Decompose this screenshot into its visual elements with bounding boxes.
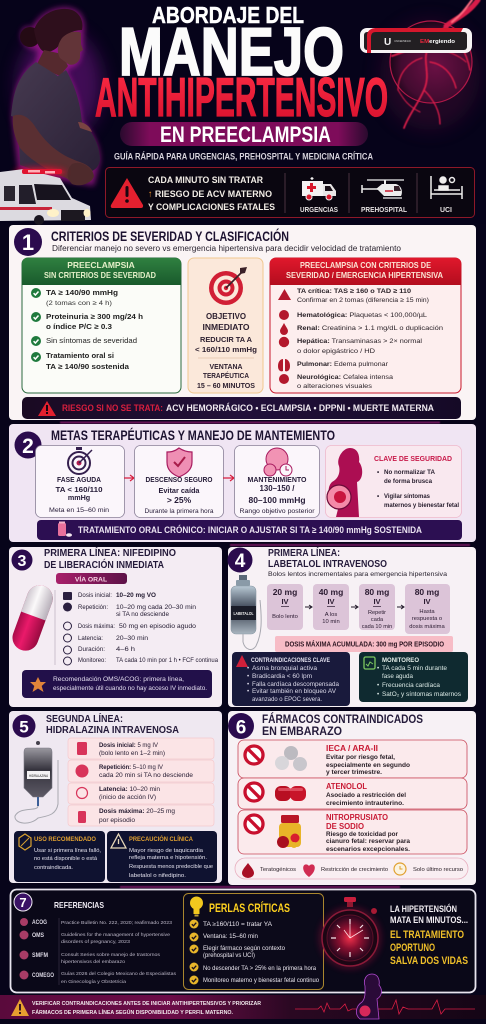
logo badge: EMergiendo xyxy=(420,39,456,45)
card: without severity: SIN CRITERIOS DE SEVERIDAD xyxy=(44,270,156,280)
references: COMEGO xyxy=(32,973,54,979)
safety text: CLAVE DE SEGURIDAD xyxy=(374,454,453,463)
criteria list: Hepática: Transaminasas > 2× normal xyxy=(297,338,423,345)
box: monitoring xyxy=(359,652,468,702)
legend xyxy=(235,858,468,879)
box: contraindications: Bradicardia < 60 lpm xyxy=(252,673,312,680)
illustration: IV bag: HIDRALAZINA xyxy=(29,774,49,778)
card: severe / hypertensive emergency xyxy=(270,258,461,393)
box: contraindications: • xyxy=(247,665,249,672)
box: monitoring: fase aguda xyxy=(382,673,414,680)
pearl list: (prehospital vs UCI) xyxy=(203,953,255,959)
row text: 4–6 h xyxy=(116,646,136,653)
box: recommended use: no está disponible o está xyxy=(34,856,98,862)
recommendation bar xyxy=(22,670,212,698)
risk bar: ACV HEMORRÁGICO • ECLAMPSIA • DPPNI • MUERTE MATERNA xyxy=(166,403,434,413)
icon: helicopter xyxy=(362,180,404,198)
arrow xyxy=(223,475,234,481)
closing message: SALVA DOS VIDAS xyxy=(390,955,468,967)
heading xyxy=(44,546,176,571)
box: critical pearls: PERLAS CRÍTICAS xyxy=(209,902,290,915)
box: contraindications xyxy=(232,652,350,706)
badge 4 xyxy=(228,548,252,572)
icon: warning triangle xyxy=(111,178,143,208)
risk bar xyxy=(22,397,461,419)
box: monitoring: Frecuencia cardíaca xyxy=(382,682,441,689)
step 4: 80 mg xyxy=(415,587,439,597)
step 2: 40 mg xyxy=(319,587,343,597)
objective text: INMEDIATO xyxy=(202,322,250,332)
panel: section 3 nifedipine xyxy=(9,546,222,707)
card: immediate objective xyxy=(188,258,263,393)
pearl list xyxy=(190,920,320,984)
badge 2: 2 xyxy=(22,435,34,458)
icon: ambulance xyxy=(302,177,336,200)
legend: Restricción de crecimiento xyxy=(321,867,388,873)
illustration: placenta with vessels xyxy=(390,0,478,128)
closing message: EL TRATAMIENTO xyxy=(390,929,464,941)
objective text: 15 – 60 MINUTOS xyxy=(197,383,255,390)
step 4: IV xyxy=(423,597,431,606)
drug row: sodium nitroprusside: Riesgo de toxicidad por xyxy=(326,831,399,838)
criteria list: Renal: Creatinina > 1.1 mg/dL o duplicación xyxy=(297,325,443,332)
card: maintenance: Rango objetivo posterior xyxy=(240,508,314,515)
badge 1: 1 xyxy=(22,230,34,255)
row text: cada 20 min si TA no desciende xyxy=(99,772,193,779)
box: recommended use: USO RECOMENDADO xyxy=(34,837,96,843)
info rows xyxy=(68,738,214,826)
step 4 xyxy=(405,584,450,634)
box: contraindications: avanzado o EPOC severa. xyxy=(252,696,322,703)
references: disorders of pregnancy, 2023 xyxy=(61,939,130,945)
card: severe / hypertensive emergency: PREECLAMPSIA CON CRITERIOS DE xyxy=(300,260,431,270)
header xyxy=(0,0,486,225)
heading: FÁRMACOS CONTRAINDICADOS xyxy=(262,713,423,726)
box: recommended use: Usar si primera línea falló, xyxy=(34,848,101,854)
recommendation bar: Recomendación OMS/ACOG: primera línea, xyxy=(53,676,184,683)
drug row: atenolol: Asociado a restricción del xyxy=(326,792,406,799)
box: clinical caution: Respuesta menos predecible que xyxy=(129,864,213,870)
alert labels: PREHOSPITAL xyxy=(361,207,408,214)
heading: CRITERIOS DE SEVERIDAD Y CLASIFICACIÓN xyxy=(51,229,289,244)
alert labels: UCI xyxy=(440,207,452,214)
row text: si TA no desciende xyxy=(116,611,169,618)
references: SMFM xyxy=(32,953,48,959)
step 1: IV xyxy=(281,597,289,606)
box: monitoring: SatO₂ y síntomas maternos xyxy=(382,691,461,698)
step arrows xyxy=(305,605,404,609)
illustration: labetalol vial xyxy=(231,575,261,649)
recommendation bar: especialmente útil cuando no hay acceso IV inmediato. xyxy=(53,685,207,692)
row text: (inicio de acción IV) xyxy=(99,794,156,801)
criteria list: Confirmar en 2 tomas (diferencia ≥ 15 min) xyxy=(297,297,429,304)
objective text: VENTANA xyxy=(210,364,242,371)
badge 6: 6 xyxy=(236,718,246,738)
row text: Duración: xyxy=(78,646,105,653)
heading xyxy=(268,546,447,578)
objective text: OBJETIVO xyxy=(206,311,246,321)
drug row: ACE inhibitors: IECA / ARA-II xyxy=(326,744,378,753)
row text: Latencia: 10–20 min xyxy=(99,786,160,793)
card: severe / hypertensive emergency: SEVERIDAD / EMERGENCIA HIPERTENSIVA xyxy=(286,270,443,280)
route pill: VÍA ORAL xyxy=(75,574,107,584)
objective text: REDUCIR TA A xyxy=(200,335,253,344)
box: contraindications: CONTRAINDICACIONES CLAVE xyxy=(251,658,330,664)
footer text xyxy=(32,1001,262,1016)
panel: section 2 goals xyxy=(9,424,476,542)
safety text: • xyxy=(377,493,379,500)
organ icons xyxy=(278,289,291,384)
step 4: dosis máxima xyxy=(409,624,445,630)
criteria list: Pulmonar: Edema pulmonar xyxy=(297,361,389,368)
footer text: FÁRMACOS DE PRIMERA LÍNEA SEGÚN DISPONIBILIDAD Y PERFIL MATERNO. xyxy=(32,1008,233,1016)
card: acute phase: FASE AGUDA xyxy=(57,475,102,484)
panel: section 5 hydralazine xyxy=(9,711,222,883)
criteria list: TA ≥ 140/90 mmHg xyxy=(46,288,119,297)
route pill xyxy=(56,573,127,584)
box: critical pearls xyxy=(184,894,324,990)
row text: Repetición: xyxy=(78,604,108,611)
step 2: IV xyxy=(327,597,335,606)
illustration: pregnant woman xyxy=(11,7,100,186)
step 1: Bolo lento xyxy=(272,614,298,620)
step 3: 80 mg xyxy=(365,587,389,597)
row text: Monitoreo: xyxy=(78,657,106,664)
drug row: sodium nitroprusside xyxy=(238,810,467,854)
criteria list xyxy=(297,288,443,390)
chronic oral treatment bar xyxy=(37,520,462,540)
row text: TA cada 10 min por 1 h • FCF continua xyxy=(116,657,218,664)
box: recommended use: contraindicada. xyxy=(34,865,73,871)
row text: Dosis máxima: 20–25 mg xyxy=(99,808,175,815)
step 2: 10 min xyxy=(322,619,340,625)
step 4: Hasta xyxy=(419,609,435,615)
step 3: cada xyxy=(371,617,384,623)
objective text xyxy=(195,311,258,390)
illustration: capsule xyxy=(9,582,57,654)
alert labels xyxy=(300,207,452,214)
badge 5 xyxy=(12,714,36,738)
illustration: ambulance xyxy=(0,167,91,225)
box: contraindications: • xyxy=(247,688,249,695)
alert box xyxy=(106,168,474,218)
icon: light bulb xyxy=(190,896,203,916)
references: REFERENCIAS xyxy=(54,900,104,910)
logo badge: UNIVERSIDAD xyxy=(394,39,412,43)
badge 1 xyxy=(14,228,42,256)
safety text: de forma brusca xyxy=(384,478,433,485)
criteria list: o alteraciones visuales xyxy=(297,383,373,390)
drug row: ACE inhibitors xyxy=(238,740,467,778)
badge 7 xyxy=(14,893,32,911)
box: clinical caution xyxy=(107,831,217,882)
card: acute phase: Meta en 15–60 min xyxy=(49,507,109,514)
row text: (bolo lento en 1–2 min) xyxy=(99,750,165,757)
references: OMS xyxy=(32,933,44,939)
card: safe descent xyxy=(134,446,224,518)
heading: PRIMERA LÍNEA: xyxy=(268,546,340,559)
icon: warning triangle xyxy=(11,999,29,1016)
drug row: ACE inhibitors: Evitar por riesgo fetal, xyxy=(326,754,395,761)
heading: Bolos lentos incrementales para emergencia hipertensiva xyxy=(268,571,447,578)
legend: Solo último recurso xyxy=(413,867,463,873)
card: safety key xyxy=(326,446,462,518)
badge 3: 3 xyxy=(18,553,27,570)
card: without severity: PREECLAMPSIA xyxy=(67,260,135,270)
criteria list: o índice P/C ≥ 0.3 xyxy=(46,322,112,331)
background glow xyxy=(0,0,486,224)
objective text: TERAPÉUTICA xyxy=(203,371,249,380)
card: acute phase: mmHg xyxy=(68,493,90,502)
step 3: IV xyxy=(373,597,381,606)
row text: por episodio xyxy=(99,817,135,824)
step 2: A los xyxy=(325,612,337,618)
references xyxy=(20,900,177,985)
heading xyxy=(262,713,423,738)
title: ABORDAJE DEL xyxy=(152,2,304,28)
closing message: LA HIPERTENSIÓN xyxy=(390,903,457,915)
safety text: • xyxy=(377,469,379,476)
box: monitoring: TA cada 5 min durante xyxy=(382,665,448,672)
heading: SEGUNDA LÍNEA: xyxy=(46,712,123,725)
row text: 20–30 min xyxy=(116,635,149,642)
pearl list: Ventana: 15–60 min xyxy=(203,934,258,940)
logo badge xyxy=(360,28,472,53)
card: safe descent: > 25% xyxy=(167,495,192,505)
row text: 50 mg en episodio agudo xyxy=(119,623,197,630)
references: ACOG xyxy=(32,920,47,926)
row text xyxy=(78,592,218,664)
alert text xyxy=(148,175,275,213)
title: MANEJO xyxy=(119,14,344,90)
heading xyxy=(46,712,179,736)
row text: Dosis inicial: xyxy=(78,592,112,599)
box: monitoring: • xyxy=(377,682,379,689)
title xyxy=(95,2,388,128)
badge 7: 7 xyxy=(19,895,27,910)
criteria list xyxy=(31,288,144,371)
alert text: CADA MINUTO SIN TRATAR xyxy=(148,175,263,186)
icon: target xyxy=(209,267,247,305)
card: maintenance: MANTENIMIENTO xyxy=(248,475,307,484)
criteria list: (2 tomas con ≥ 4 h) xyxy=(46,300,112,307)
row text: Dosis inicial: 5 mg IV xyxy=(99,742,159,749)
step 1: 20 mg xyxy=(273,587,297,597)
card: maintenance: 80–100 mmHg xyxy=(248,496,306,505)
dosing rows xyxy=(63,592,218,665)
icon: ICU bed xyxy=(431,176,462,199)
criteria list: TA crítica: TAS ≥ 160 o TAD ≥ 110 xyxy=(297,288,411,295)
heading: HIDRALAZINA INTRAVENOSA xyxy=(46,724,179,736)
pearl list: Elegir fármaco según contexto xyxy=(203,946,286,952)
step 3: Repetir xyxy=(368,610,386,616)
pearl list: TA ≥160/110 = tratar YA xyxy=(203,922,272,928)
box: monitoring: MONITOREO xyxy=(382,657,419,664)
criteria list: Tratamiento oral si xyxy=(46,351,114,360)
arrow xyxy=(124,475,134,481)
criteria list: o dolor epigástrico / HD xyxy=(297,348,375,355)
ECG line xyxy=(295,1000,475,1014)
risk bar: RIESGO SI NO SE TRATA: xyxy=(62,403,163,413)
badge 4: 4 xyxy=(235,551,246,572)
row text: Dosis máxima: xyxy=(78,623,115,630)
heading: METAS TERAPÉUTICAS Y MANEJO DE MANTEMIENTO xyxy=(51,428,335,443)
row text: Latencia: xyxy=(78,635,103,642)
footer text: VERIFICAR CONTRAINDICACIONES ANTES DE INICIAR ANTIHIPERTENSIVOS Y PRIORIZAR xyxy=(32,1001,262,1007)
card: acute phase xyxy=(36,446,124,518)
row text xyxy=(99,742,193,824)
badge 5: 5 xyxy=(19,718,29,736)
box: clinical caution: Mayor riesgo de taquicardia xyxy=(129,848,204,854)
card: safe descent: Evitar caída xyxy=(158,488,200,495)
alert text: ↑ RIESGO DE ACV MATERNO xyxy=(148,189,272,200)
panel: section 1 criteria xyxy=(9,225,476,420)
alert text: Y COMPLICACIONES FATALES xyxy=(148,202,275,213)
panel: section 6 contraindicated drugs xyxy=(228,711,476,885)
subtitle pill: EN PREECLAMPSIA xyxy=(160,122,331,147)
drug row: atenolol: ATENOLOL xyxy=(326,782,367,791)
row text: 10–20 mg VO xyxy=(116,592,156,599)
panel: section 4 labetalol xyxy=(228,546,476,707)
subheading: Diferenciar manejo no severo vs emergencia hipertensiva para decidir velocidad de tratamiento xyxy=(52,244,402,253)
objective text: < 160/110 mmHg xyxy=(195,345,258,354)
closing message: MATA EN MINUTOS... xyxy=(390,915,468,926)
safety text xyxy=(374,454,459,509)
drug row: sodium nitroprusside: DE SODIO xyxy=(326,822,364,831)
references: hipertensivos del embarazo xyxy=(61,959,125,965)
illustration: labetalol vial: LABETALOL xyxy=(234,611,254,616)
box: clinical caution: refleja materna e hipotensión. xyxy=(129,855,207,861)
box: contraindications: • xyxy=(247,681,249,688)
box: contraindications: Evitar también en bloqueo AV xyxy=(252,688,337,695)
step 3 xyxy=(359,584,395,630)
step 1 xyxy=(267,584,303,630)
criteria list: Proteinuria ≥ 300 mg/24 h xyxy=(46,312,144,321)
pearl list: No descender TA > 25% en la primera hora xyxy=(203,966,317,972)
references: Guidelines for the management of hypertensive xyxy=(61,932,170,938)
panel: section 7 references and pearls xyxy=(10,890,476,992)
card: maintenance: 130–150 / xyxy=(260,484,295,493)
references: Practice Bulletin No. 222, 2020; reafirmado 2023 xyxy=(61,920,172,926)
illustration: IV bag xyxy=(15,741,58,823)
row icons xyxy=(63,592,72,665)
heading: LABETALOL INTRAVENOSO xyxy=(268,558,387,570)
references: Consult Series sobre manejo de trastornos xyxy=(61,952,161,958)
max dose bar xyxy=(275,636,453,652)
box: clinical caution: labetalol o nifedipino. xyxy=(129,873,186,879)
card: acute phase: TA < 160/110 xyxy=(56,485,102,494)
box: contraindications: Falla cardíaca descompensada xyxy=(252,681,340,688)
criteria list: TA ≥ 140/90 sostenida xyxy=(46,362,130,371)
criteria list: Hematológica: Plaquetas < 100,000/µL xyxy=(297,312,427,319)
box: contraindications: • xyxy=(247,673,249,680)
drug row: atenolol: crecimiento intrauterino. xyxy=(326,800,404,807)
row text: Repetición: 5–10 mg IV xyxy=(99,764,164,771)
footer warning strip xyxy=(0,974,486,1019)
card: without severity xyxy=(22,258,181,393)
heading: DE LIBERACIÓN INMEDIATA xyxy=(44,558,164,571)
safety text: No normalizar TA xyxy=(384,469,436,476)
drug row: ACE inhibitors: especialmente en segundo xyxy=(326,762,410,769)
step 4: respuesta o xyxy=(412,616,442,622)
tagline: GUÍA RÁPIDA PARA URGENCIAS, PREHOSPITAL Y MEDICINA CRÍTICA xyxy=(114,152,373,162)
drug row: sodium nitroprusside: escenarios excepcionales. xyxy=(326,846,410,853)
silhouette: pregnant woman xyxy=(327,448,362,517)
references: en Ginecología y Obstetricia xyxy=(61,979,126,985)
heading: PRIMERA LÍNEA: NIFEDIPINO xyxy=(44,546,176,559)
box: monitoring: • xyxy=(377,691,379,698)
logo badge: U xyxy=(384,37,391,48)
pearl list: Monitoreo materno y bienestar fetal continuo xyxy=(203,978,320,984)
silhouette: woman xyxy=(356,974,381,1019)
dose steps xyxy=(267,584,450,634)
alert labels: URGENCIAS xyxy=(300,207,338,214)
card: maintenance xyxy=(234,446,320,518)
card: safe descent: DESCENSO SEGURO xyxy=(146,475,213,484)
row text: 10–20 mg cada 20–30 min xyxy=(116,604,197,611)
criteria list: Neurológica: Cefalea intensa xyxy=(297,374,393,381)
step 2 xyxy=(313,584,349,630)
drug row: atenolol xyxy=(238,778,467,809)
row icons xyxy=(76,742,88,823)
step 3: cada 10 min xyxy=(362,624,392,630)
safety text: Vigilar síntomas xyxy=(384,493,431,500)
drug row: ACE inhibitors: y tercer trimestre. xyxy=(326,769,382,776)
closing message: OPORTUNO xyxy=(390,942,435,954)
box: recommended use xyxy=(14,831,105,882)
criteria list: Sin síntomas de severidad xyxy=(46,336,137,345)
closing message xyxy=(390,903,468,967)
badge 6 xyxy=(228,713,254,739)
drug row: sodium nitroprusside: cianuro fetal: reservar para xyxy=(326,838,411,845)
box: contraindications: Asma bronquial activa xyxy=(252,665,318,672)
chronic oral treatment bar: TRATAMIENTO ORAL CRÓNICO: INICIAR O AJUSTAR SI TA ≥ 140/90 mmHg SOSTENIDA xyxy=(78,524,422,535)
heading: EN EMBARAZO xyxy=(262,726,342,738)
card: safe descent: Durante la primera hora xyxy=(144,508,214,515)
max dose bar: DOSIS MÁXIMA ACUMULADA: 300 mg POR EPISODIO xyxy=(285,640,444,648)
box: clinical caution: PRECAUCIÓN CLÍNICA xyxy=(129,835,194,843)
legend: Teratogénicos xyxy=(260,867,296,873)
badge 3 xyxy=(12,550,32,570)
illustration: stopwatch xyxy=(318,897,382,970)
box: monitoring: • xyxy=(377,665,379,672)
safety text: maternos y bienestar fetal xyxy=(384,502,459,509)
references: Guías 2026 del Colegio Mexicano de Especialistas xyxy=(61,971,177,977)
drug row: sodium nitroprusside: NITROPRUSIATO xyxy=(326,813,388,822)
badge 2 xyxy=(14,432,42,458)
